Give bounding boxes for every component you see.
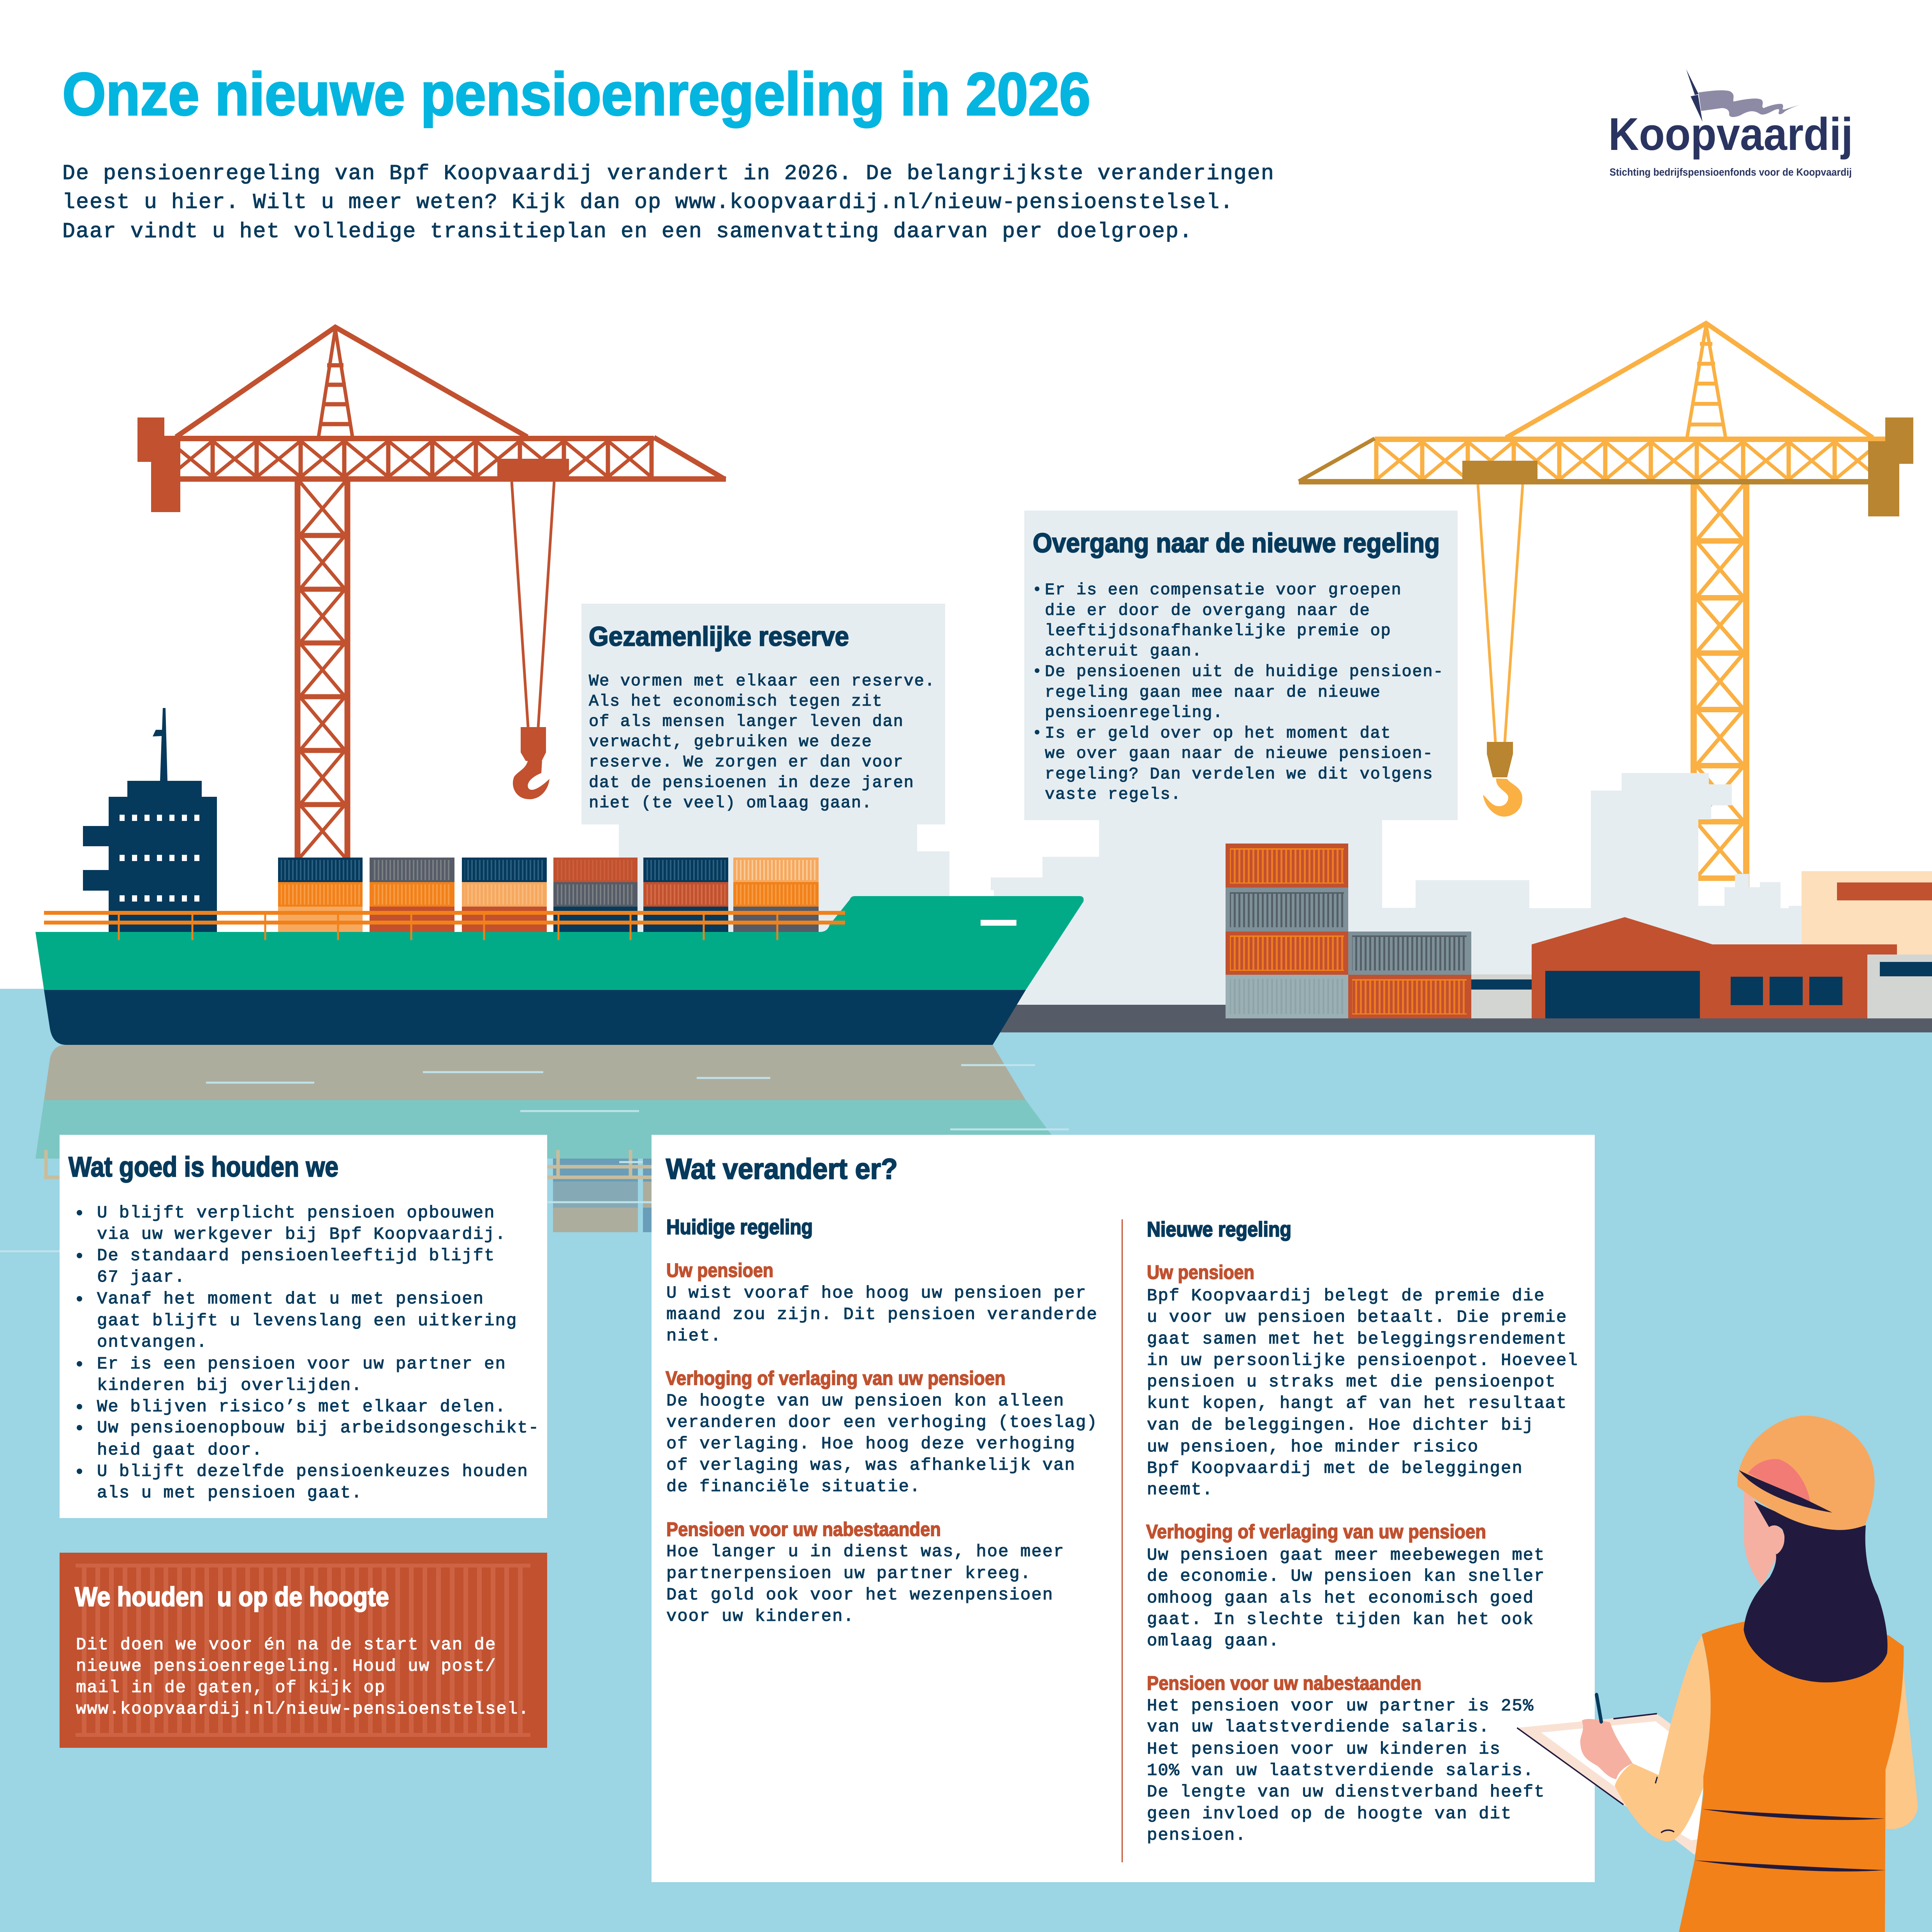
- bullet list: regeling? Dan verdelen we dit volgens: [1045, 765, 1433, 784]
- bullet list: U blijft verplicht pensioen opbouwen: [97, 1203, 495, 1223]
- body text: mail in de gaten, of kijk op: [76, 1678, 386, 1698]
- bullet list: 67 jaar.: [97, 1268, 185, 1287]
- column: Huidige regeling: voor uw kinderen.: [666, 1607, 854, 1626]
- column: Nieuwe regeling: Uw pensioen gaat meer meebewegen met: [1147, 1546, 1545, 1565]
- column: Nieuwe regeling: De lengte van uw dienstverband heeft: [1147, 1782, 1545, 1802]
- panel: Wat goed is houden we: [60, 1135, 547, 1518]
- bullet list: Er is een compensatie voor groepen: [1045, 581, 1402, 599]
- column: Nieuwe regeling: gaat samen met het beleggingsrendement: [1147, 1330, 1567, 1349]
- column: Nieuwe regeling: Het pensioen voor uw kinderen is: [1147, 1740, 1501, 1759]
- heading: Wat verandert er?: [666, 1153, 898, 1185]
- ship reflection: [0, 1045, 1069, 1251]
- logo: Koopvaardij: [1608, 69, 1853, 178]
- skyline background: [619, 773, 1802, 1020]
- bullet list: Vanaf het moment dat u met pensioen: [97, 1289, 484, 1309]
- body text: www.koopvaardij.nl/nieuw-pensioenstelsel.: [76, 1700, 530, 1719]
- column: Nieuwe regeling: gaat. In slechte tijden kan het ook: [1147, 1610, 1534, 1629]
- body text: niet (te veel) omlaag gaan.: [589, 794, 872, 812]
- column: Nieuwe regeling: in uw persoonlijke pensioenpot. Hoeveel: [1147, 1351, 1578, 1370]
- column: Nieuwe regeling: uw pensioen, hoe minder risico: [1147, 1437, 1479, 1457]
- red crane: [137, 327, 726, 858]
- bullet list: Uw pensioenopbouw bij arbeidsongeschikt-: [97, 1418, 539, 1438]
- bullet list: [1035, 581, 1444, 804]
- column: Nieuwe regeling: u voor uw pensioen betaalt. Die premie: [1147, 1308, 1567, 1327]
- body text: [589, 672, 935, 812]
- column: Nieuwe regeling: omlaag gaan.: [1147, 1631, 1280, 1651]
- body text: of als mensen langer leven dan: [589, 712, 904, 731]
- bullet list: we over gaan naar de nieuwe pensioen-: [1045, 744, 1433, 763]
- intro text: Daar vindt u het volledige transitieplan en een samenvatting daarvan per doelgroep.: [62, 219, 1193, 244]
- bullet list: We blijven risico’s met elkaar delen.: [97, 1397, 506, 1417]
- column: Huidige regeling: Hoe langer u in dienst was, hoe meer: [666, 1542, 1065, 1562]
- column: Nieuwe regeling: pensioen u straks met die pensioenpot: [1147, 1372, 1556, 1392]
- ship railing: [44, 913, 845, 940]
- panel: Gezamenlijke reserve: [581, 604, 945, 824]
- column: Huidige regeling: Uw pensioen: [666, 1259, 773, 1281]
- bullet list: heid gaat door.: [97, 1441, 263, 1460]
- body text: Dit doen we voor én na de start van de: [76, 1635, 496, 1655]
- body text: reserve. We zorgen er dan voor: [589, 753, 904, 771]
- bullet list: [77, 1203, 539, 1503]
- column: Huidige regeling: U wist vooraf hoe hoog uw pensioen per: [666, 1284, 1087, 1303]
- bullet list: U blijft dezelfde pensioenkeuzes houden: [97, 1462, 528, 1481]
- heading: Overgang naar de nieuwe regeling: [1033, 528, 1440, 558]
- yellow crane: [1299, 323, 1913, 888]
- bullet list: Er is een pensioen voor uw partner en: [97, 1354, 506, 1374]
- heading: Wat goed is houden we: [69, 1152, 338, 1183]
- column: Huidige regeling: [666, 1215, 1098, 1626]
- bullet list: via uw werkgever bij Bpf Koopvaardij.: [97, 1225, 506, 1244]
- intro text: De pensioenregeling van Bpf Koopvaardij verandert in 2026. De belangrijkste veranderingen: [62, 161, 1275, 186]
- ship containers: [278, 858, 819, 932]
- panel: Overgang naar de nieuwe regeling: [1024, 511, 1458, 820]
- column: Huidige regeling: de financiële situatie.: [666, 1477, 921, 1497]
- column: Huidige regeling: niet.: [666, 1326, 722, 1346]
- column: Nieuwe regeling: Uw pensioen: [1147, 1261, 1254, 1283]
- bullet list: De standaard pensioenleeftijd blijft: [97, 1246, 495, 1266]
- body text: We vormen met elkaar een reserve.: [589, 672, 935, 690]
- bullet list: vaste regels.: [1045, 785, 1181, 804]
- column: Huidige regeling: of verlaging was, was afhankelijk van: [666, 1456, 1076, 1475]
- body text: Als het economisch tegen zit: [589, 692, 883, 711]
- column: Huidige regeling: veranderen door een verhoging (toeslag): [666, 1413, 1098, 1432]
- body text: nieuwe pensioenregeling. Houd uw post/: [76, 1657, 496, 1676]
- column: Nieuwe regeling: kunt kopen, hangt af van het resultaat: [1147, 1394, 1567, 1413]
- bullet list: achteruit gaan.: [1045, 642, 1202, 660]
- logo: Koopvaardij: Stichting bedrijfspensioenfonds voor de Koopvaardij: [1610, 166, 1852, 178]
- harbour buildings: [1471, 917, 1932, 1018]
- column: Nieuwe regeling: omhoog gaan als het economisch goed: [1147, 1589, 1534, 1608]
- column: Nieuwe regeling: Bpf Koopvaardij met de beleggingen: [1147, 1459, 1523, 1478]
- column: Nieuwe regeling: van uw laatstverdiende salaris.: [1147, 1717, 1490, 1737]
- bullet list: ontvangen.: [97, 1333, 208, 1352]
- column: Nieuwe regeling: geen invloed op de hoogte van dit: [1147, 1804, 1512, 1824]
- column: Huidige regeling: partnerpensioen uw partner kreeg.: [666, 1564, 1031, 1583]
- bullet list: Is er geld over op het moment dat: [1045, 724, 1391, 743]
- title: Onze nieuwe pensioenregeling in 2026: [62, 60, 1090, 128]
- column: Huidige regeling: De hoogte van uw pensioen kon alleen: [666, 1391, 1065, 1411]
- bullet list: De pensioenen uit de huidige pensioen-: [1045, 662, 1444, 681]
- panel: We houden u op de hoogte: [60, 1553, 547, 1748]
- column: Huidige regeling: Dat gold ook voor het wezenpensioen: [666, 1585, 1053, 1605]
- bullet list: leeftijdsonafhankelijke premie op: [1045, 622, 1391, 640]
- bullet list: regeling gaan mee naar de nieuwe: [1045, 683, 1381, 702]
- column: Nieuwe regeling: neemt.: [1147, 1480, 1213, 1500]
- column: Nieuwe regeling: van de beleggingen. Hoe dichter bij: [1147, 1416, 1534, 1435]
- ship bridge: [83, 708, 217, 932]
- column: Nieuwe regeling: 10% van uw laatstverdiende salaris.: [1147, 1761, 1534, 1781]
- column: Huidige regeling: Verhoging of verlaging van uw pensioen: [666, 1367, 1006, 1389]
- column: Nieuwe regeling: Verhoging of verlaging van uw pensioen: [1146, 1521, 1486, 1543]
- column: Nieuwe regeling: Bpf Koopvaardij belegt de premie die: [1147, 1286, 1545, 1306]
- ship hull: [35, 896, 1084, 1045]
- column: Nieuwe regeling: Het pensioen voor uw partner is 25%: [1147, 1696, 1534, 1716]
- illustration: woman with clipboard: [1517, 1416, 1918, 1932]
- column: Nieuwe regeling: [1146, 1218, 1578, 1845]
- column: Huidige regeling: of verlaging. Hoe hoog deze verhoging: [666, 1434, 1076, 1454]
- stacked quay containers: [1226, 844, 1471, 1018]
- bullet list: kinderen bij overlijden.: [97, 1376, 363, 1395]
- body text: dat de pensioenen in deze jaren: [589, 773, 914, 792]
- beige building: [1802, 871, 1932, 965]
- bullet list: als u met pensioen gaat.: [97, 1483, 363, 1503]
- panel: Wat verandert er?: [652, 1135, 1595, 1882]
- column: Nieuwe regeling: de economie. Uw pensioen kan sneller: [1147, 1567, 1545, 1586]
- body text: verwacht, gebruiken we deze: [589, 733, 872, 751]
- logo: Koopvaardij: Koopvaardij: [1608, 109, 1853, 160]
- column: Huidige regeling: Pensioen voor uw nabestaanden: [666, 1518, 941, 1540]
- bullet list: die er door de overgang naar de: [1045, 601, 1370, 620]
- heading: Gezamenlijke reserve: [589, 621, 849, 652]
- column: Nieuwe regeling: Pensioen voor uw nabestaanden: [1147, 1672, 1421, 1694]
- body text: [76, 1635, 530, 1719]
- column: Huidige regeling: maand zou zijn. Dit pensioen veranderde: [666, 1305, 1098, 1324]
- column: Nieuwe regeling: Nieuwe regeling: [1147, 1218, 1291, 1241]
- quay: [966, 1005, 1932, 1032]
- heading: We houden u op de hoogte: [75, 1582, 389, 1612]
- column: Nieuwe regeling: pensioen.: [1147, 1826, 1247, 1845]
- intro text: [62, 161, 1275, 244]
- intro text: leest u hier. Wilt u meer weten? Kijk dan op www.koopvaardij.nl/nieuw-pensioenstelsel.: [62, 190, 1234, 215]
- column: Huidige regeling: Huidige regeling: [666, 1215, 813, 1239]
- bullet list: pensioenregeling.: [1045, 703, 1223, 722]
- water: [0, 989, 1932, 1932]
- bullet list: gaat blijft u levenslang een uitkering: [97, 1311, 517, 1331]
